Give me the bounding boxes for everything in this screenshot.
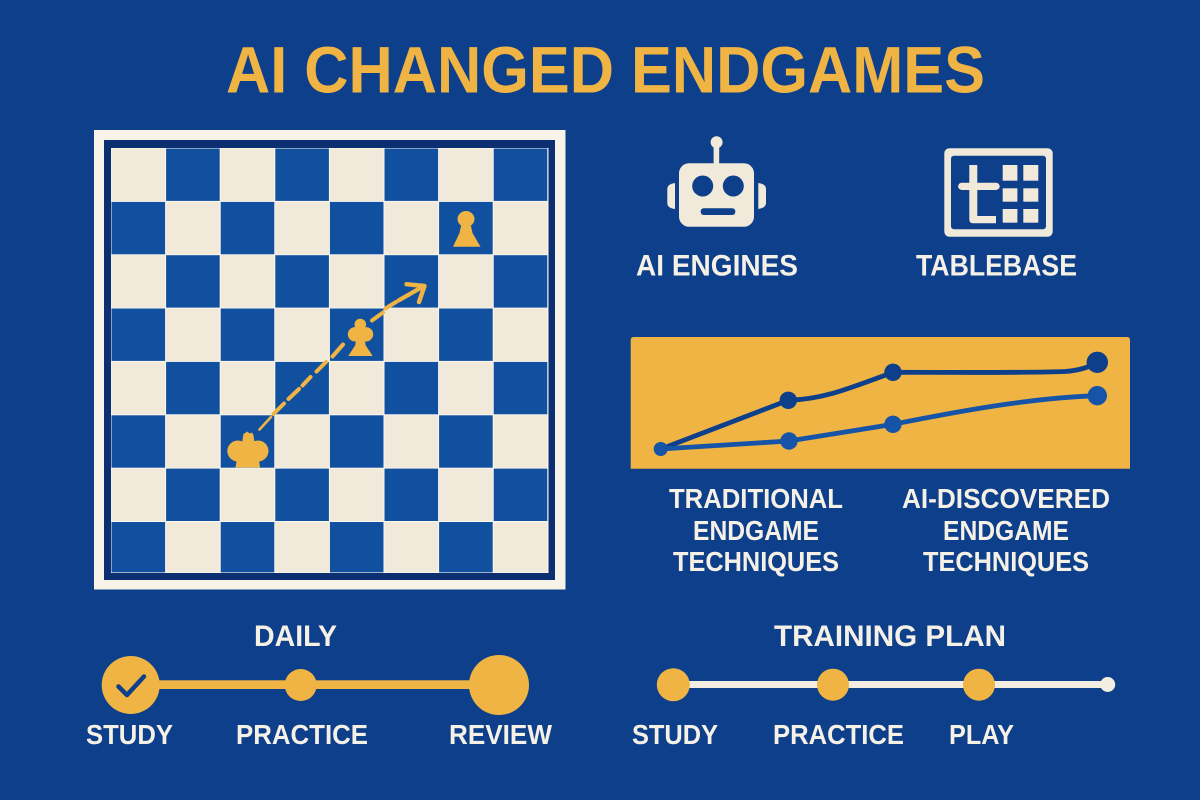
- labels: daily steps: PRACTICE: [236, 719, 368, 750]
- timeline: training plan: [657, 668, 1115, 701]
- text: traditional endgame techniques: TRADITIONAL: [669, 483, 843, 514]
- dark line series: [661, 352, 1108, 449]
- light line series: [654, 386, 1107, 456]
- chart: technique lines: [631, 337, 1130, 469]
- labels: training steps: PRACTICE: [773, 719, 904, 750]
- arrow: dashed move path: [260, 284, 424, 430]
- heading: training plan: TRAINING PLAN: [774, 620, 1006, 653]
- labels: daily steps: STUDY: [86, 719, 173, 750]
- icon: check mark: [118, 676, 144, 695]
- labels: daily steps: REVIEW: [449, 719, 553, 750]
- label: AI engines: AI ENGINES: [636, 250, 798, 282]
- panel: chessboard: [94, 130, 566, 590]
- label: tablebase: TABLEBASE: [916, 250, 1077, 282]
- text: AI-discovered endgame techniques: TECHNIQUES: [923, 546, 1089, 577]
- icon: tablebase grid: [944, 148, 1053, 237]
- icon: robot (AI engines): [667, 136, 766, 227]
- labels: daily steps: [86, 719, 553, 750]
- text: traditional endgame techniques: [669, 483, 843, 577]
- icon: king piece: [227, 432, 268, 468]
- timeline: daily: [102, 655, 529, 715]
- text: traditional endgame techniques: TECHNIQUES: [673, 546, 839, 577]
- labels: training steps: PLAY: [949, 719, 1014, 750]
- heading: daily: DAILY: [254, 620, 337, 653]
- text: AI-discovered endgame techniques: AI-DISCOVERED: [902, 483, 1110, 514]
- labels: training steps: STUDY: [632, 719, 718, 750]
- text: AI-discovered endgame techniques: ENDGAME: [943, 515, 1069, 546]
- icon: club-topped piece: [348, 319, 373, 356]
- labels: training steps: [632, 719, 1014, 750]
- icon: pawn: [453, 211, 480, 247]
- title: AI CHANGED ENDGAMES: [226, 32, 985, 106]
- text: AI-discovered endgame techniques: [902, 483, 1110, 577]
- text: traditional endgame techniques: ENDGAME: [693, 515, 819, 546]
